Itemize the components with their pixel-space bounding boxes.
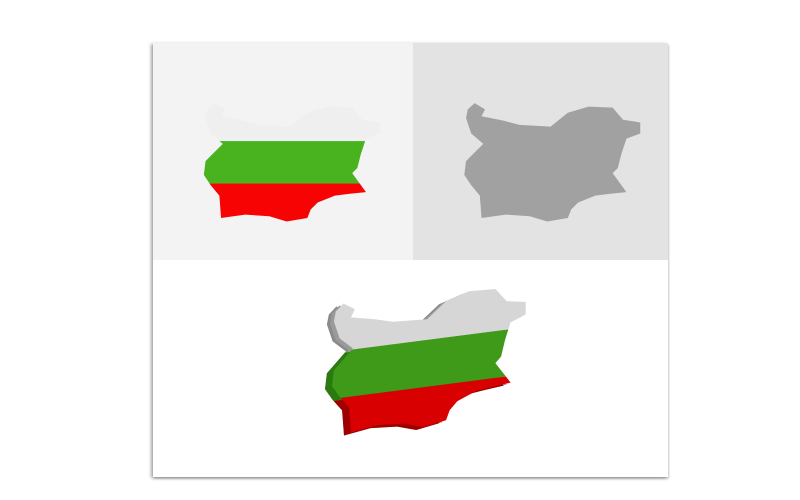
illustration [153, 43, 668, 436]
frame [153, 43, 668, 477]
panel: gray map [413, 43, 668, 260]
panel: flat flag map [153, 43, 413, 260]
panel: 3D flag map [325, 289, 526, 436]
